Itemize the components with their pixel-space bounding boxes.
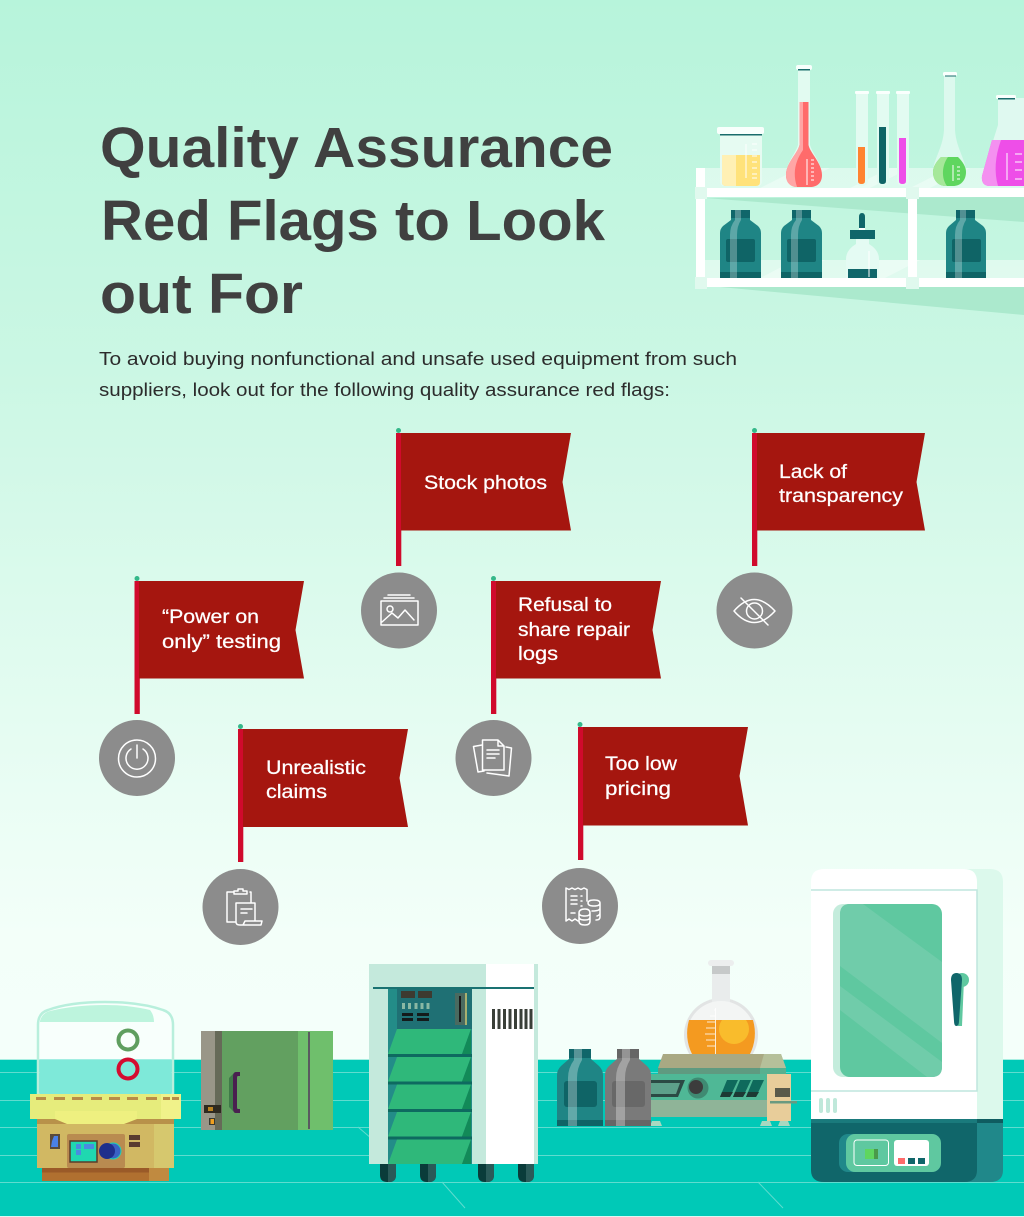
top plate [658, 1054, 786, 1068]
bottle 1 [720, 210, 761, 278]
control details [401, 991, 467, 1025]
flag: Refusal to share repair logs: Refusal to [518, 594, 612, 616]
front [811, 869, 977, 1119]
title: out For [100, 262, 303, 326]
icon: documents [456, 720, 532, 796]
body [651, 1074, 779, 1100]
equipment: hot plate stirrer [650, 1054, 797, 1126]
magenta erlenmeyer flask [982, 95, 1024, 186]
flag: Unrealistic claims: claims [266, 781, 327, 803]
equipment: round flask with orange liquid [684, 960, 758, 1072]
equipment: cabinet with drawers [369, 964, 538, 1182]
vents [494, 1009, 531, 1029]
dome top tint [40, 1005, 154, 1022]
beaker [717, 127, 764, 186]
flag: Power on only testing [134, 576, 304, 714]
side panel [767, 1074, 791, 1121]
shelf frame [695, 168, 1024, 289]
flag: Lack of transparency: Lack of [779, 461, 848, 483]
door outline [811, 890, 977, 1091]
icon: clipboard report [202, 869, 278, 945]
equipment: large incubator cabinet [811, 869, 1003, 1182]
flag: Refusal to share repair logs [491, 576, 661, 714]
vents [819, 1098, 837, 1113]
equipment: green oven [201, 1031, 333, 1130]
bottle 3 [946, 210, 986, 278]
incubator base [37, 1119, 174, 1168]
flag: Too low pricing: pricing [605, 778, 671, 800]
bottle 2 [781, 210, 822, 278]
status rings [118, 1030, 138, 1078]
flag: Unrealistic claims: Unrealistic [266, 757, 366, 779]
flag: Refusal to share repair logs: share repair [518, 619, 631, 641]
flag: Refusal to share repair logs: logs [518, 643, 558, 665]
keys [720, 1080, 764, 1097]
intro text: To avoid buying nonfunctional and unsafe used equipment from such [99, 348, 737, 369]
window [833, 904, 942, 1077]
test tubes [855, 91, 910, 186]
display [651, 1080, 685, 1097]
shelf shadows [705, 197, 1024, 315]
intro text [99, 348, 737, 400]
dropper bottle [846, 213, 879, 278]
flag: Too low pricing [578, 722, 748, 860]
wheels [380, 1164, 534, 1182]
title: Red Flags to Look [101, 189, 605, 253]
intro text: suppliers, look out for the following quality assurance red flags: [99, 379, 670, 400]
icon: image stack [361, 572, 437, 648]
title [100, 116, 613, 326]
yellow lid [30, 1094, 181, 1124]
flag: Power on only testing: only” testing [162, 631, 281, 653]
icon: crossed eye [716, 572, 792, 648]
flag: Stock photos: Stock photos [424, 472, 547, 494]
icon: receipt and coins [542, 868, 618, 944]
feet [650, 1121, 790, 1126]
flag: Too low pricing: Too low [605, 753, 678, 775]
side wall [960, 869, 1003, 1119]
shelf with lab glassware [695, 65, 1024, 315]
dome lower tint [40, 1060, 172, 1094]
floor [0, 1059, 1024, 1217]
incubator foot [42, 1168, 169, 1181]
bottle gray on floor [605, 1049, 651, 1126]
glass dome [38, 1002, 173, 1094]
control panel [50, 1134, 140, 1168]
shelf back panels [705, 168, 1024, 278]
control panel [839, 1134, 941, 1172]
handle [951, 973, 969, 1026]
flag: Power on only testing: “Power on [162, 606, 259, 628]
drawers [388, 1029, 472, 1164]
dial [688, 1078, 708, 1098]
red volumetric flask [786, 65, 822, 187]
flag: Stock photos [396, 428, 571, 566]
flag: Unrealistic claims [238, 724, 408, 862]
flag: Lack of transparency: transparency [779, 485, 903, 507]
green flask [933, 72, 966, 186]
bottle teal on floor [557, 1049, 603, 1126]
flag: Lack of transparency [752, 428, 925, 566]
equipment: glass dome incubator [30, 1002, 181, 1181]
icon: power button [99, 720, 175, 796]
title: Quality Assurance [100, 116, 613, 180]
